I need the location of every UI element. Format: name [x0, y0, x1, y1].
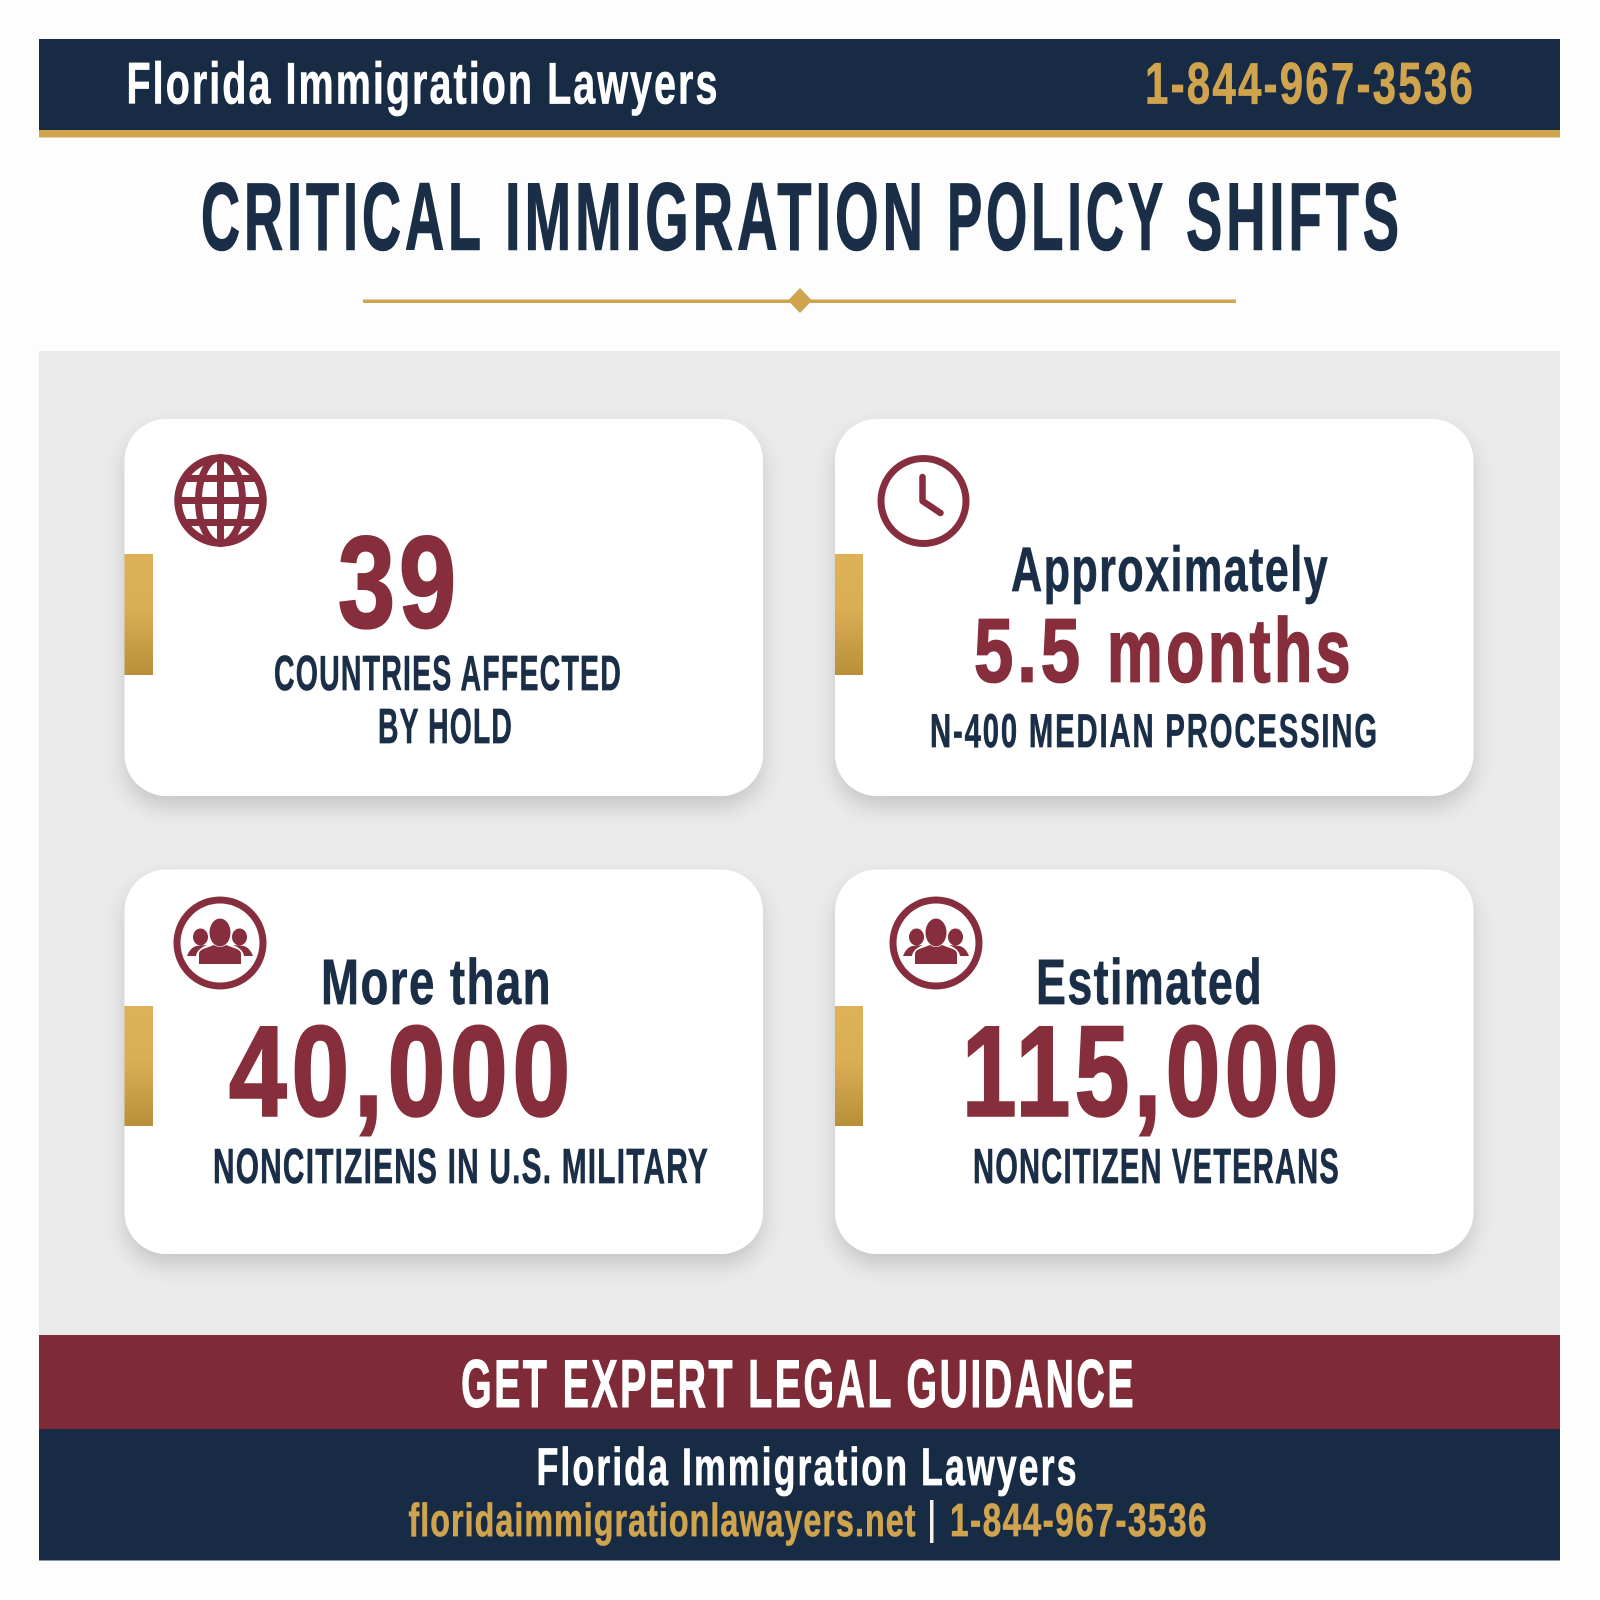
stat label: countries affected by hold: COUNTRIES AFFECTED	[274, 647, 622, 701]
footer contact bar	[39, 1429, 1560, 1560]
title: POLICY	[947, 164, 1167, 270]
icon: people group	[893, 900, 979, 986]
card: 40,000	[124, 870, 763, 1254]
footer website and phone: floridaimmigrationlawayers.net	[408, 1494, 916, 1546]
lead-in: more than: More than	[321, 946, 552, 1018]
title divider with diamond	[363, 288, 1236, 313]
stat value 5.5 months: 5.5	[974, 602, 1084, 702]
footer firm name: Florida Immigration Lawyers	[536, 1438, 1078, 1497]
call-to-action heading: GET EXPERT LEGAL GUIDANCE	[461, 1346, 1136, 1422]
header bar	[39, 39, 1560, 138]
stat label: countries affected by hold	[274, 647, 622, 754]
icon: people group	[177, 900, 263, 986]
call-to-action banner	[39, 1335, 1560, 1429]
stat label: countries affected by hold: BY HOLD	[378, 700, 513, 754]
lead-in: estimated: Estimated	[1036, 946, 1263, 1018]
icon: clock	[881, 458, 966, 544]
stat value 5.5 months	[974, 602, 1354, 702]
stat value 40,000: 40,000	[229, 1000, 575, 1144]
card: 39 countries	[124, 419, 763, 796]
stat label: noncitizens in U.S. military: NONCITIZIENS IN U.S. MILITARY	[213, 1140, 709, 1194]
card: 115,000	[835, 870, 1474, 1254]
footer website and phone: 1-844-967-3536	[950, 1494, 1208, 1546]
stat value 5.5 months: months	[1107, 602, 1354, 702]
title: IMMIGRATION	[505, 164, 927, 270]
stat label: noncitizen veterans: NONCITIZEN VETERANS	[973, 1140, 1340, 1194]
title: CRITICAL	[201, 164, 485, 270]
icon: globe	[178, 458, 264, 544]
stat value 115,000: 115,000	[962, 1000, 1343, 1144]
stat value 39: 39	[338, 509, 460, 655]
gray content panel	[39, 351, 1560, 1335]
header phone number: 1-844-967-3536	[1145, 52, 1475, 116]
title: SHIFTS	[1186, 164, 1403, 270]
title	[201, 164, 1403, 270]
lead-in: approximately: Approximately	[1011, 535, 1329, 605]
card: 5.5 months	[835, 419, 1474, 796]
header firm name: Florida Immigration Lawyers	[126, 52, 720, 116]
